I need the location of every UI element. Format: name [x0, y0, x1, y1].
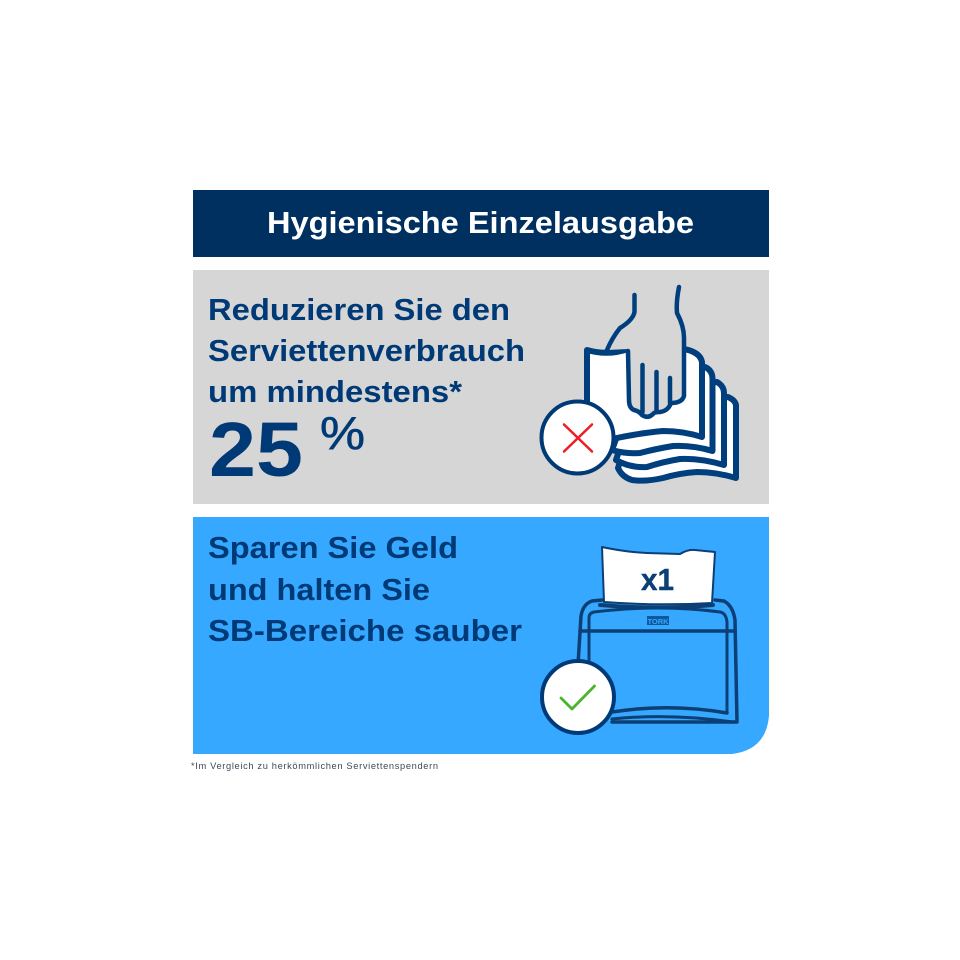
heading: save money and keep areas clean: Sparen Sie Geld — [208, 531, 458, 565]
heading: save money and keep areas clean — [208, 531, 522, 648]
icon: hand pulling napkins from stack — [587, 287, 736, 481]
heading: save money and keep areas clean: SB-Bereiche sauber — [208, 614, 522, 648]
statistic: 25 percent — [209, 407, 365, 493]
footnote: *Im Vergleich zu herkömmlichen Serviettenspendern — [191, 761, 438, 771]
napkin with x1: x1 — [641, 562, 674, 597]
icon: red cross badge — [542, 402, 614, 474]
hand outline — [607, 287, 684, 417]
heading: reduce napkin consumption — [208, 293, 525, 409]
icon: green check badge — [542, 661, 614, 733]
heading: save money and keep areas clean: und halten Sie — [208, 573, 430, 607]
heading: reduce napkin consumption: Reduzieren Sie den — [208, 293, 510, 327]
heading: reduce napkin consumption: Serviettenverbrauch — [208, 334, 525, 368]
front sheet — [587, 349, 702, 439]
statistic: 25 percent: % — [320, 407, 365, 459]
dispenser logo: TORK — [647, 617, 669, 626]
rear sheets — [618, 397, 736, 481]
title banner — [193, 190, 769, 257]
napkin with x1 — [602, 547, 715, 604]
title banner: Hygienische Einzelausgabe — [267, 206, 694, 240]
heading: reduce napkin consumption: um mindestens* — [208, 375, 462, 409]
icon: napkin dispenser — [578, 547, 737, 722]
panel: save money — [193, 517, 769, 754]
statistic: 25 percent: 25 — [209, 407, 303, 493]
panel: reduce consumption — [193, 270, 769, 504]
